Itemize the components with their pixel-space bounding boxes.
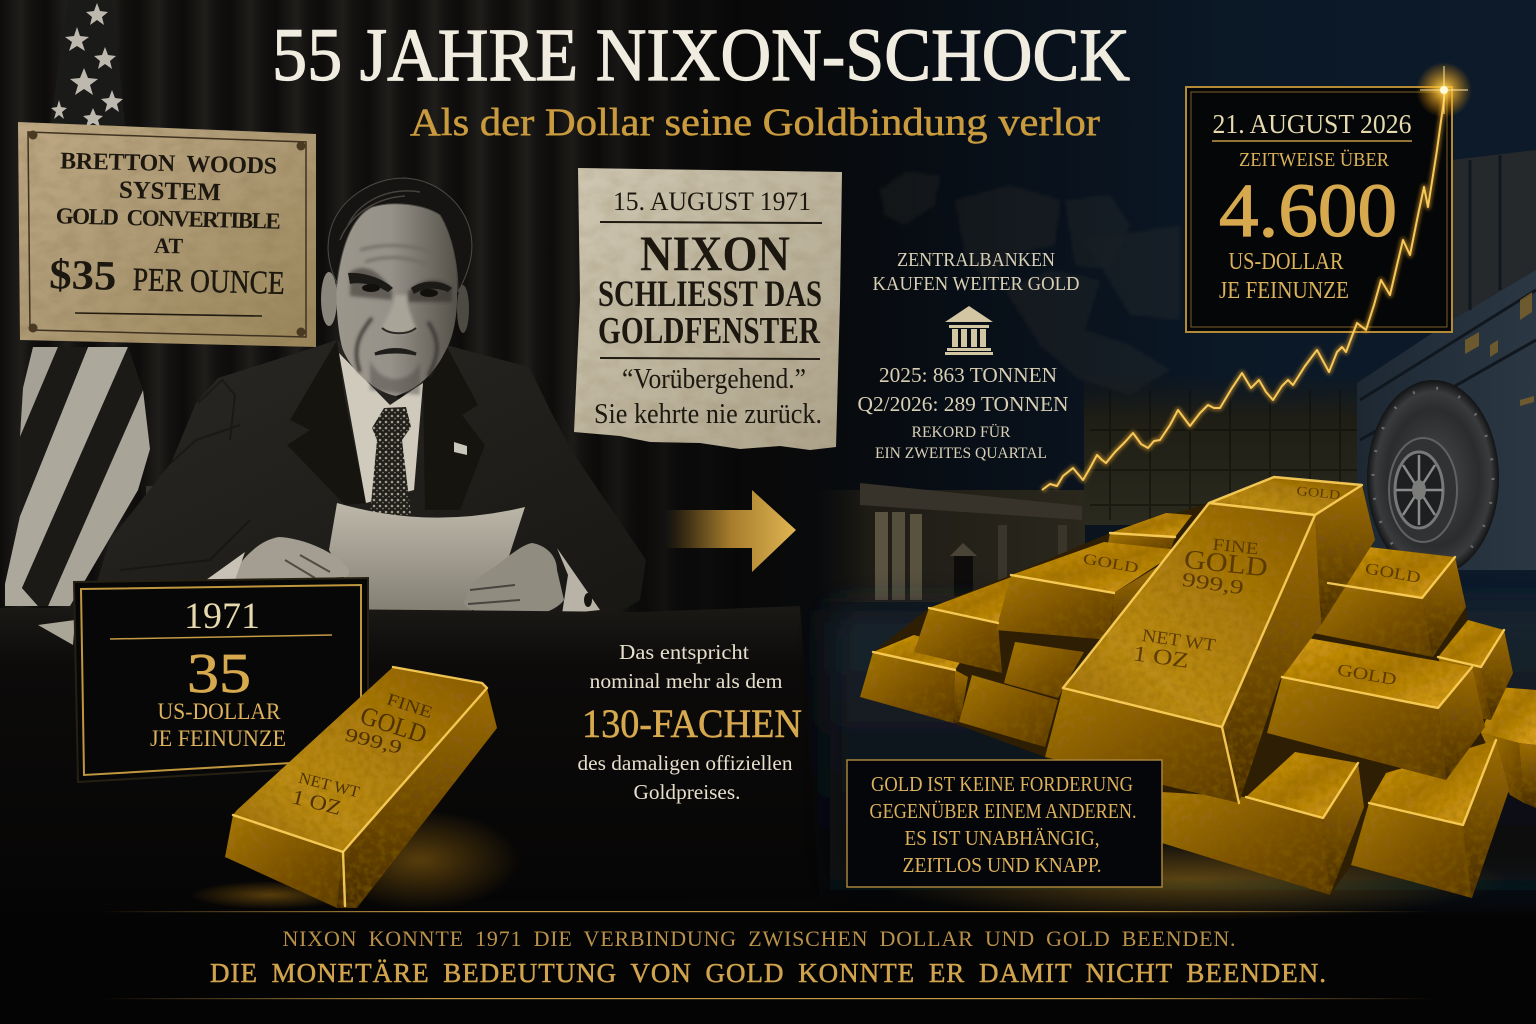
plaque: Bretton Woods: AT <box>154 233 184 258</box>
newspaper clipping: GOLDFENSTER <box>598 310 820 352</box>
panel: 2026 price box <box>1186 87 1452 332</box>
plaque: Bretton Woods: PER OUNCE <box>132 262 285 302</box>
ears <box>321 272 337 326</box>
lapel pin <box>454 442 467 455</box>
bottom band <box>0 880 1536 1024</box>
bar F <box>1267 638 1485 780</box>
bar back right <box>1438 620 1513 720</box>
bar engravings: GOLD <box>1296 483 1341 502</box>
text: nominal comparison: des damaligen offiziellen <box>578 751 793 775</box>
main bar back part <box>1209 477 1375 625</box>
panel: 2026 price box: 4.600 <box>1219 169 1397 253</box>
panel: quote box: ES IST UNABHÄNGIG, <box>904 826 1100 850</box>
icon: bank vault door <box>1367 380 1499 576</box>
newspaper clipping: “Vorübergehend.” <box>622 364 806 395</box>
facial features <box>348 273 393 292</box>
face <box>336 204 457 396</box>
table <box>0 606 820 905</box>
bar engravings: GOLD <box>1364 560 1422 587</box>
plaque: Bretton Woods: GOLD CONVERTIBLE <box>56 203 281 234</box>
text: nominal comparison: Goldpreises. <box>634 780 740 804</box>
flag <box>5 0 150 606</box>
newspaper clipping: 15. AUGUST 1971 <box>613 187 811 216</box>
panel: 2026 price box: 21. AUGUST 2026 <box>1212 109 1412 139</box>
under bar <box>1004 642 1084 698</box>
newspaper clipping: Sie kehrte nie zurück. <box>594 399 822 430</box>
bar highlights <box>873 477 1504 825</box>
bar engravings: NET WT <box>1141 625 1217 655</box>
bar engravings: GOLD <box>1183 544 1269 582</box>
text: central banks: KAUFEN WEITER GOLD <box>872 273 1080 295</box>
right hand <box>464 543 564 617</box>
gold bar: single on table: FINE <box>384 689 435 722</box>
panel: quote box: GEGENÜBER EINEM ANDEREN. <box>870 799 1136 823</box>
panel: 2026 price box: ZEITWEISE ÜBER <box>1239 148 1390 171</box>
bottom statement: NIXON KONNTE 1971 DIE VERBINDUNG ZWISCHEN DOLLAR UND GOLD BEENDEN. <box>282 926 1236 951</box>
bar H <box>1162 752 1364 895</box>
newspaper clipping <box>574 168 842 450</box>
bar engravings: 999,9 <box>1181 569 1245 599</box>
bar engravings: GOLD <box>1336 660 1398 689</box>
text: nominal comparison: 130-FACHEN <box>582 701 802 746</box>
panel: quote box: GOLD IST KEINE FORDERUNG <box>871 772 1133 796</box>
bank building <box>815 483 1085 602</box>
gold bar: single on table <box>190 667 520 910</box>
bar B <box>914 570 1040 673</box>
text: central banks: EIN ZWEITES QUARTAL <box>875 445 1047 462</box>
bar engravings: 1 OZ <box>1132 640 1191 673</box>
note on table <box>38 620 75 645</box>
gold bar: single on table: 999,9 <box>343 724 404 759</box>
background: city tower and bank wall <box>1084 150 1536 570</box>
text: nominal comparison <box>578 640 802 804</box>
panel: 1971 price plaque: US-DOLLAR <box>158 699 281 724</box>
text: central banks <box>858 249 1080 462</box>
panel: 2026 price box: US-DOLLAR <box>1228 249 1344 275</box>
facial shading <box>350 245 452 395</box>
tie <box>370 407 411 515</box>
background: world map <box>880 172 1180 395</box>
subtitle: Als der Dollar seine Goldbindung verlor <box>410 101 1100 144</box>
bar A <box>860 635 968 723</box>
Nixon figure <box>97 178 646 617</box>
newspaper clipping: SCHLIESST DAS <box>598 274 822 315</box>
text: nominal comparison: nominal mehr als dem <box>590 669 782 693</box>
chart: gold price line <box>1042 62 1472 490</box>
panel: 1971 price plaque <box>74 578 368 782</box>
chair <box>146 486 164 524</box>
small back bar <box>1107 513 1192 552</box>
bar far right <box>1481 687 1536 808</box>
bar engravings: GOLD <box>1082 551 1140 577</box>
plaque: Bretton Woods: $35 <box>49 252 117 300</box>
panel: quote box <box>847 760 1162 887</box>
text: nominal comparison: Das entspricht <box>619 640 749 664</box>
newspaper clipping: NIXON <box>640 225 790 281</box>
panel: 1971 price plaque: JE FEINUNZE <box>150 726 286 751</box>
bar engravings: FINE <box>1212 535 1259 558</box>
paper <box>329 503 525 614</box>
hair <box>328 178 472 292</box>
bar C <box>996 542 1180 645</box>
gold bars: pile <box>860 477 1536 920</box>
panel: 1971 price plaque: 35 <box>187 643 251 705</box>
bar G <box>1351 740 1509 898</box>
panel: 2026 price box: JE FEINUNZE <box>1219 278 1349 304</box>
bar E <box>1313 547 1466 657</box>
arrow <box>665 490 796 572</box>
shirt <box>339 353 423 503</box>
left hand <box>229 537 349 580</box>
gold bar: single on table: GOLD <box>357 701 430 749</box>
bottom statement: DIE MONETÄRE BEDEUTUNG VON GOLD KONNTE ER DAMIT NICHT BEENDEN. <box>210 958 1326 988</box>
text: central banks: REKORD FÜR <box>912 423 1011 441</box>
panel: quote box: ZEITLOS UND KNAPP. <box>902 853 1102 877</box>
curtain backdrop <box>6 0 666 612</box>
bar D <box>959 675 1058 747</box>
main bar <box>1045 503 1321 803</box>
title: 55 JAHRE NIXON-SCHOCK <box>272 14 1130 97</box>
plaque: Bretton Woods <box>18 122 316 347</box>
panel: 1971 price plaque: 1971 <box>184 596 260 637</box>
bottom statement <box>100 911 1436 999</box>
text: central banks: 2025: 863 TONNEN <box>879 363 1057 387</box>
floor right side <box>830 610 1536 890</box>
text: central banks: ZENTRALBANKEN <box>897 249 1055 271</box>
plaque: Bretton Woods: BRETTON WOODS <box>60 148 277 180</box>
bar engravings <box>1082 483 1422 689</box>
gold bar: single on table: 1 OZ <box>290 785 344 820</box>
icon: bank temple <box>945 306 993 355</box>
pile shadow base <box>860 485 1536 898</box>
text: central banks: Q2/2026: 289 TONNEN <box>858 392 1068 416</box>
suit <box>97 340 646 612</box>
gold bar: single on table: NET WT <box>297 770 361 801</box>
plaque: Bretton Woods: SYSTEM <box>119 177 221 206</box>
